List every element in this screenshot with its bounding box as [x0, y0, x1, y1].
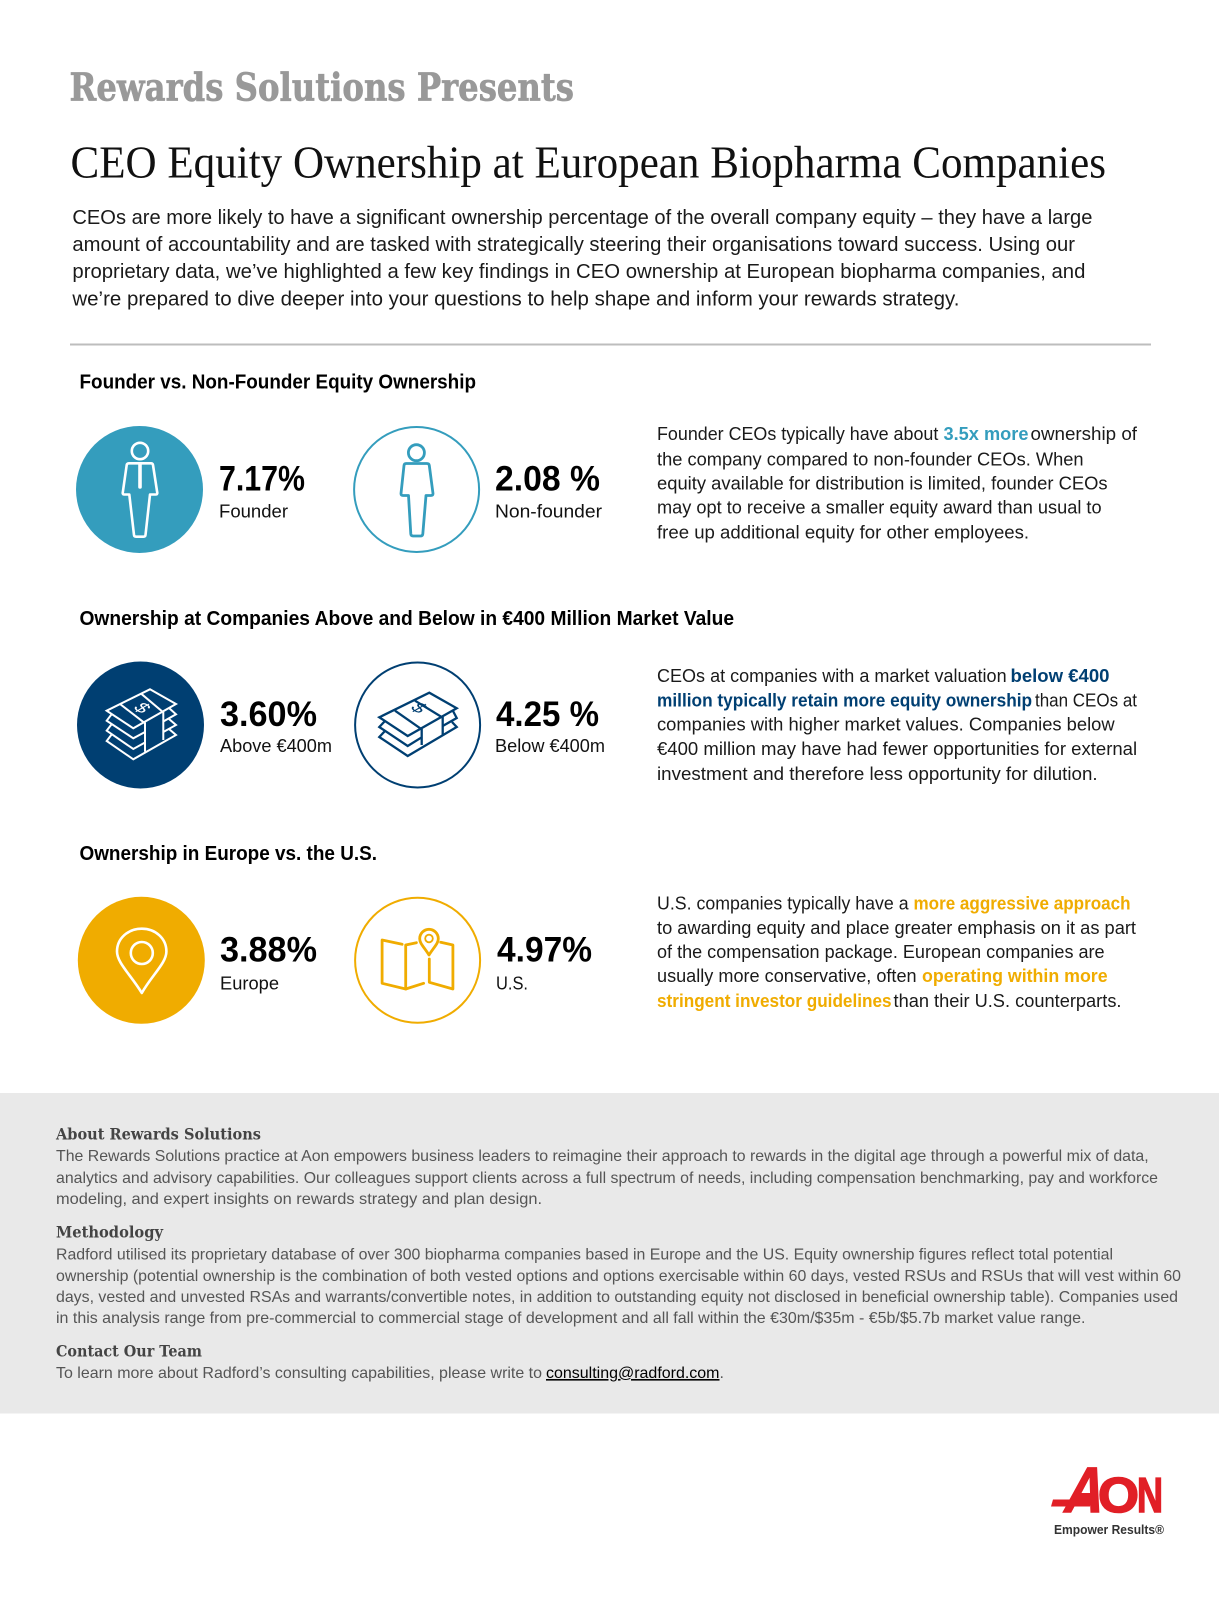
section heading: europe vs US: Ownership in Europe vs. the U.S. [80, 843, 377, 865]
contact heading: Contact Our Team [56, 1342, 202, 1360]
text block: market value explanation: below €400 [1010, 665, 1110, 686]
text block: market value explanation: investment and therefore less opportunity for dilution. [657, 763, 1098, 784]
icon: short money stack in outlined circle: $ [405, 700, 432, 717]
text block: europe vs US explanation: stringent investor guidelines [657, 990, 892, 1011]
logo: Aon Empower Results: O [1098, 1469, 1139, 1523]
stat: europe: 3.88% [220, 930, 317, 970]
intro paragraph: we’re prepared to dive deeper into your questions to help shape and inform your rewards strategy. [71, 288, 959, 310]
stat: non-founder: 2.08 % [495, 460, 600, 498]
icon: non-founder person in outlined circle [354, 427, 479, 552]
text block: europe vs US explanation: operating within more [922, 965, 1108, 986]
icon: location pin in filled circle [78, 897, 205, 1024]
panel: above vs below 400 million [77, 608, 1137, 788]
stat: U.S.: 4.97% [497, 930, 592, 970]
intro paragraph: CEOs are more likely to have a significant ownership percentage of the overall company equity – they have a large [72, 206, 1092, 229]
stat: above 400m: 3.60% [220, 695, 317, 734]
text block: europe vs US explanation [657, 892, 1136, 1011]
text block: europe vs US explanation: more aggressive approach [914, 892, 1130, 914]
text block: europe vs US explanation: to awarding equity and place greater emphasis on it as part [657, 917, 1136, 938]
stat: founder: Founder [219, 500, 288, 522]
text block: founder explanation: 3.5x more [944, 423, 1028, 444]
stat: europe: Europe [220, 972, 279, 994]
intro paragraph: amount of accountability and are tasked with strategically steering their organisations toward success. Using our [72, 233, 1075, 256]
intro paragraph [71, 206, 1092, 310]
text block: market value explanation: than CEOs at [1035, 690, 1137, 710]
methodology text [56, 1246, 1181, 1327]
icon: short money stack in outlined circle [355, 662, 480, 788]
text block: founder explanation: may opt to receive a smaller equity award than usual to [657, 496, 1102, 518]
contact text: consulting@radford.com [546, 1365, 720, 1382]
panel: europe vs U.S. [78, 843, 1136, 1024]
about text: The Rewards Solutions practice at Aon empowers business leaders to reimagine their approach to rewards in the digital age through a powerful mix of data, [56, 1148, 1149, 1165]
icon: tall money stack in filled circle: $ [128, 700, 155, 717]
eyebrow heading: Rewards Solutions Presents [70, 64, 574, 110]
icon: folded map with pin in outlined circle [355, 898, 480, 1023]
stat: founder: 7.17% [219, 460, 305, 498]
about text: modeling, and expert insights on rewards strategy and plan design. [56, 1191, 542, 1208]
text block: europe vs US explanation: than their U.S. counterparts. [894, 990, 1122, 1011]
stat: non-founder: Non-founder [495, 500, 602, 522]
logo: Aon Empower Results: A [1059, 1454, 1114, 1526]
text block: europe vs US explanation: of the compensation package. European companies are [657, 941, 1105, 962]
text block: founder explanation: ownership of [1030, 423, 1138, 444]
contact text: To learn more about Radford’s consulting capabilities, please write to [56, 1365, 542, 1382]
text block: founder explanation: free up additional equity for other employees. [657, 522, 1029, 542]
logo: Aon Empower Results: Empower Results® [1054, 1523, 1165, 1537]
text block: founder explanation: Founder CEOs typically have about [657, 423, 938, 444]
about text [56, 1148, 1158, 1208]
stat: below 400m: 4.25 % [496, 695, 599, 734]
intro paragraph: proprietary data, we’ve highlighted a few key findings in CEO ownership at European biopharma companies, and [72, 260, 1085, 283]
text block: market value explanation: companies with higher market values. Companies below [657, 714, 1115, 734]
panel: footer notes band [0, 1093, 1219, 1414]
contact text: . [720, 1365, 724, 1382]
stat: below 400m [495, 695, 605, 756]
methodology text: in this analysis range from pre-commercial to commercial stage of development and all fall within the €30m/$35m - €5b/$5.7b market value range. [56, 1310, 1086, 1327]
stat: U.S.: U.S. [496, 972, 528, 994]
text block: market value explanation [657, 665, 1137, 784]
text block: market value explanation: million typically retain more equity ownership [657, 690, 1032, 710]
stat: founder [219, 460, 305, 522]
text block: europe vs US explanation: U.S. companies typically have a [657, 892, 909, 914]
methodology heading: Methodology [56, 1222, 164, 1242]
stat: above 400m: Above €400m [220, 735, 332, 756]
text block: founder explanation: the company compared to non-founder CEOs. When [657, 448, 1084, 470]
text block: founder explanation: equity available for distribution is limited, founder CEOs [657, 472, 1108, 494]
text block: europe vs US explanation: usually more conservative, often [657, 965, 917, 986]
stat: non-founder [495, 460, 602, 522]
stat: europe [220, 930, 317, 994]
methodology text: days, vested and unvested RSAs and warrants/convertible notes, in addition to outstanding equity not disclosed in beneficial ownership table). Companies used [56, 1289, 1178, 1306]
title: CEO Equity Ownership at European Biopharma Companies [70, 136, 1106, 188]
panel: founder vs non-founder [76, 372, 1138, 553]
stat: below 400m: Below €400m [495, 735, 605, 756]
methodology text: Radford utilised its proprietary database of over 300 biopharma companies based in Europe and the US. Equity ownership figures reflect total potential [56, 1246, 1113, 1264]
text block: founder explanation [657, 423, 1138, 542]
text block: market value explanation: €400 million may have had fewer opportunities for external [657, 738, 1137, 759]
text block: market value explanation: CEOs at companies with a market valuation [657, 665, 1007, 686]
methodology text: ownership (potential ownership is the combination of both vested options and options exercisable within 60 days, vested RSUs and RSUs that will vest within 60 [56, 1268, 1181, 1285]
section heading: market value: Ownership at Companies Above and Below in €400 Million Market Value [80, 608, 734, 630]
logo: Aon Empower Results [1051, 1454, 1165, 1537]
stat: above 400m [220, 695, 332, 756]
stat: U.S. [496, 930, 592, 994]
icon: tall money stack in filled circle [77, 662, 204, 788]
section heading: founder: Founder vs. Non-Founder Equity Ownership [80, 372, 476, 394]
about heading: About Rewards Solutions [55, 1124, 261, 1144]
logo: Aon Empower Results: N [1137, 1469, 1163, 1523]
about text: analytics and advisory capabilities. Our colleagues support clients across a full spectrum of needs, including compensation benchmarking, pay and workforce [56, 1170, 1158, 1187]
icon: founder person in filled circle [76, 426, 203, 553]
